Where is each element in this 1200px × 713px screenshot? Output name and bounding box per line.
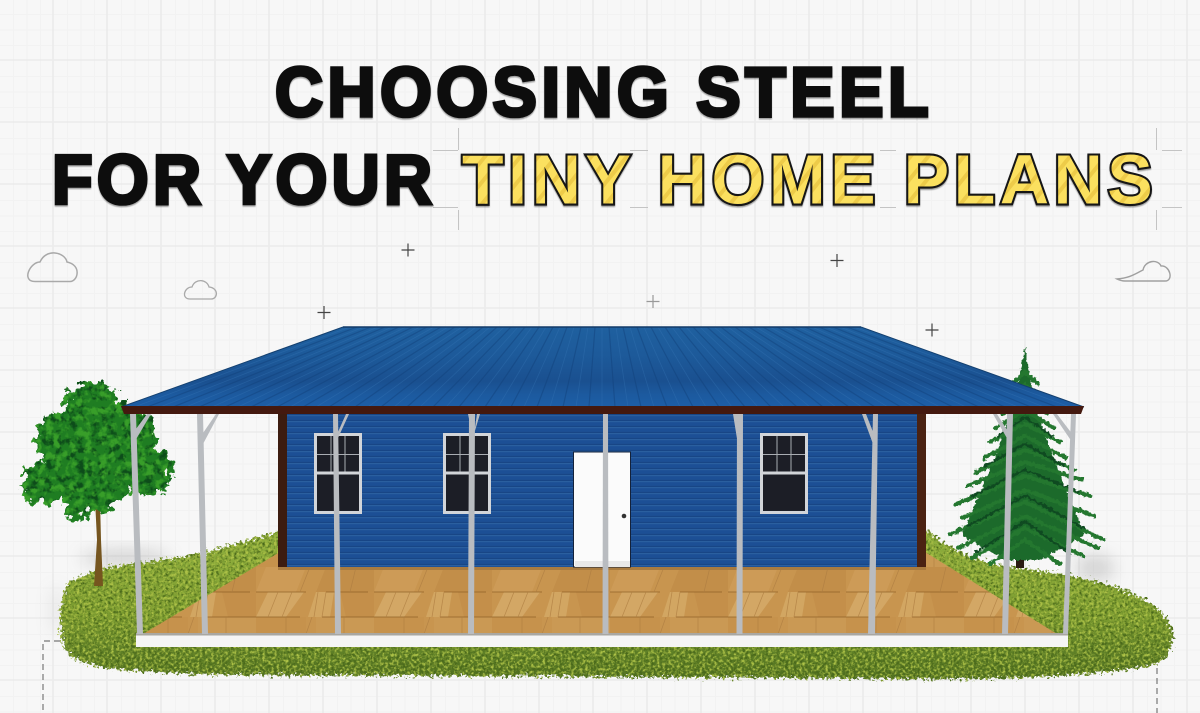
deck: [143, 552, 1057, 634]
icon: cloud right: [1117, 261, 1170, 281]
roof: [121, 327, 1084, 407]
post 7: [862, 414, 878, 634]
icon: large cloud left: [28, 253, 77, 282]
tree canopy: [22, 382, 172, 520]
icon: small cloud left: [184, 281, 216, 299]
ground shadows behind lawn: [51, 549, 1115, 635]
post 1: [130, 414, 151, 634]
icon: pine tree: [950, 347, 1104, 568]
dashed guide lines below lawn: [43, 641, 1157, 713]
icon: leafy tree: [22, 382, 172, 586]
wall corner trim left: [278, 414, 287, 567]
crop guide lines around highlighted title: [433, 128, 1182, 230]
house wall siding: [286, 414, 918, 567]
icon: plus marks: [318, 244, 938, 336]
post 3: [333, 414, 349, 634]
tree trunk: [94, 500, 103, 586]
pine trunk: [1016, 540, 1024, 568]
post 2: [197, 414, 219, 634]
title: [52, 53, 1153, 219]
roof fascia: [121, 406, 1084, 414]
post 9: [1053, 414, 1076, 634]
pine foliage: [950, 347, 1104, 564]
post 4: [468, 414, 480, 634]
house: [121, 327, 1084, 647]
lawn: [60, 531, 1173, 679]
steel porch posts: [130, 414, 1076, 634]
white foundation slab: [136, 633, 1068, 647]
post 5: [602, 414, 608, 634]
title line 1: CHOOSING STEEL: [275, 53, 929, 131]
door: [574, 452, 630, 567]
post 8: [993, 414, 1013, 634]
window 1: [314, 433, 362, 514]
post 6: [733, 414, 743, 634]
wall corner trim right: [917, 414, 926, 567]
title line 2: yellow highlighted part: TINY HOME PLANS: [462, 141, 1153, 219]
window 3: [760, 433, 808, 514]
deck threshold shadow: [278, 567, 926, 570]
window 2: [443, 433, 491, 514]
title line 2: black part: FOR YOUR: [52, 141, 432, 219]
